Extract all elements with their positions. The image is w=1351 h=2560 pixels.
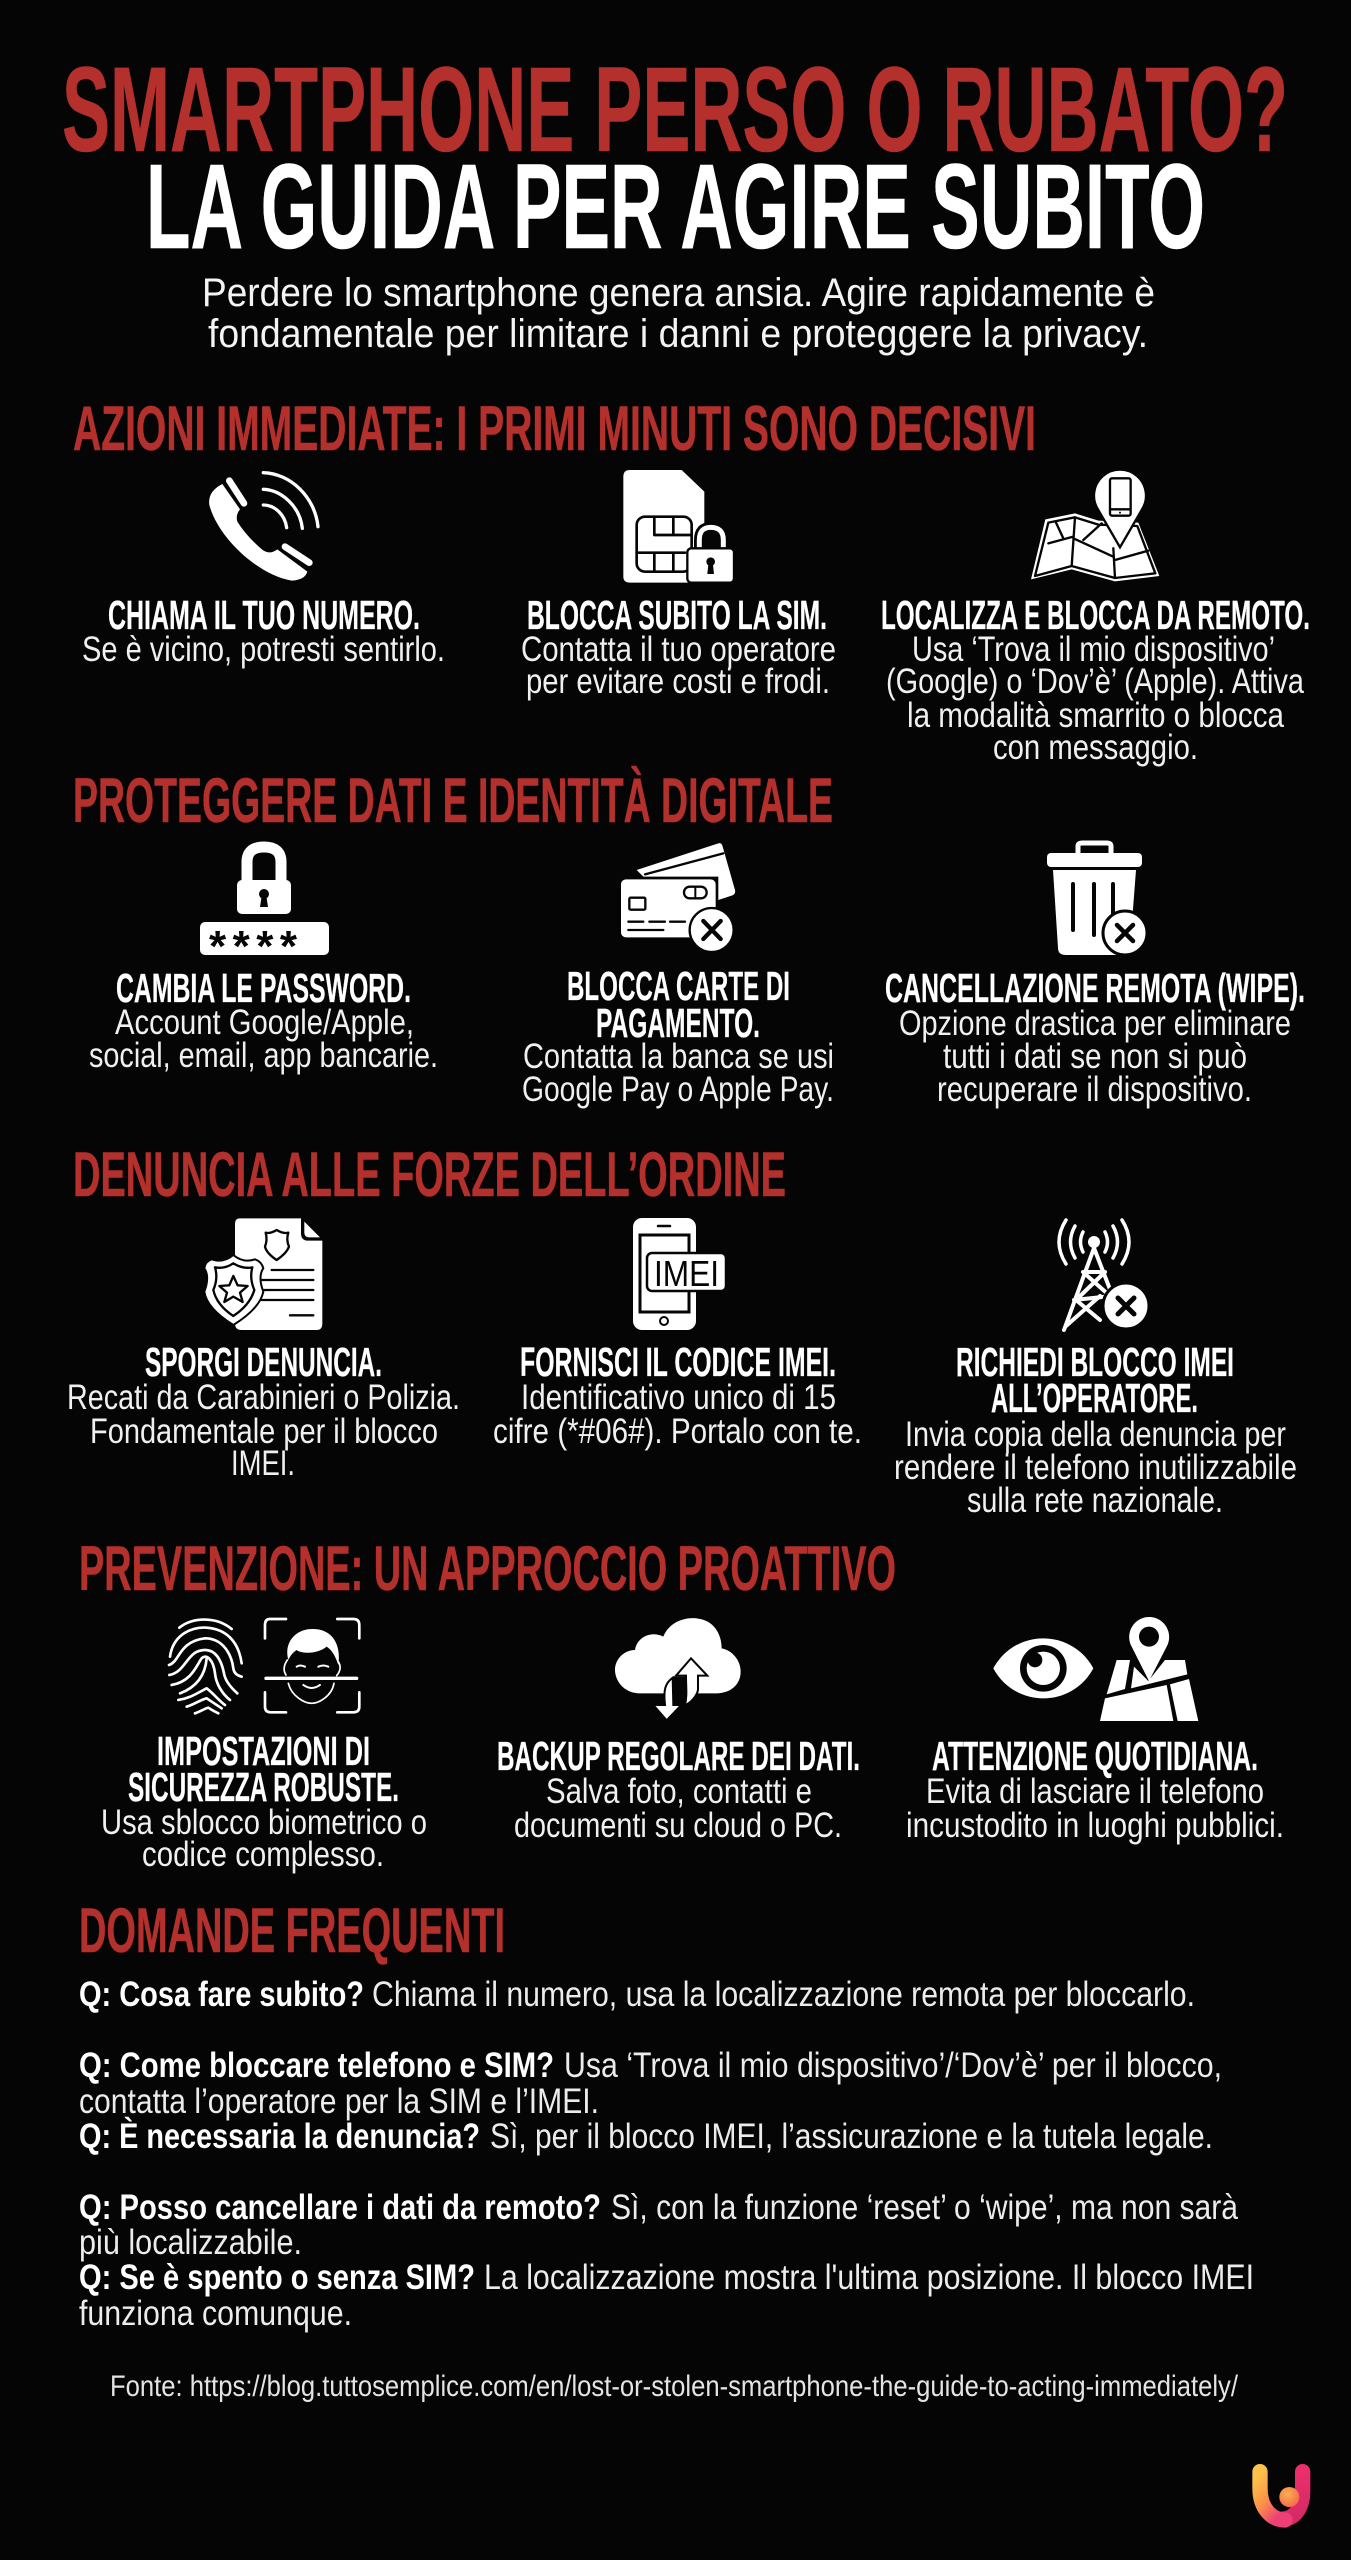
card text: carte: Google Pay o Apple Pay. <box>522 1070 834 1109</box>
card text: localizza: la modalità smarrito o blocca <box>907 696 1284 735</box>
faq 2: contatta l’operatore per la SIM e l’IMEI. <box>79 2082 599 2121</box>
logo <box>1260 2472 1303 2520</box>
icon: lock and password <box>200 847 329 971</box>
icon: cell tower blocked <box>1059 1220 1149 1330</box>
card text: wipe: tutti i dati se non si può <box>943 1037 1247 1076</box>
icon: payment cards blocked <box>620 843 735 952</box>
card text: imei <box>493 1378 862 1451</box>
faq 1: Chiama il numero, usa la localizzazione remota per bloccarlo. <box>372 1975 1195 2014</box>
card text: denuncia <box>67 1378 460 1483</box>
faq 3: Sì, per il blocco IMEI, l’assicurazione e la tutela legale. <box>490 2117 1213 2156</box>
heading: proteggere dati: PROTEGGERE DATI E IDENTITÀ DIGITALE <box>73 766 833 836</box>
icon: phone with IMEI: IMEI <box>654 1253 719 1294</box>
card text: blocco imei <box>894 1415 1297 1520</box>
card text: denuncia: IMEI. <box>231 1444 295 1483</box>
icon: eye and map pin <box>993 1617 1198 1721</box>
card text: wipe: recuperare il dispositivo. <box>937 1070 1252 1109</box>
card text: sim <box>521 630 836 701</box>
card heading: denuncia: SPORGI DENUNCIA. <box>145 1339 382 1385</box>
icon: police report <box>204 1218 322 1330</box>
faq 5: funziona comunque. <box>79 2294 352 2333</box>
card heading: password: CAMBIA LE PASSWORD. <box>116 965 411 1011</box>
card heading: chiama: CHIAMA IL TUO NUMERO. <box>108 592 420 638</box>
icon: fingerprint and face id <box>169 1619 359 1713</box>
card text: attenzione <box>906 1772 1284 1845</box>
faq 2: Usa ‘Trova il mio dispositivo’/‘Dov’è’ per il blocco, <box>564 2046 1222 2085</box>
card heading: carte <box>567 963 790 1046</box>
card heading: sicurezza: SICUREZZA ROBUSTE. <box>128 1764 399 1810</box>
faq 2 <box>79 2046 1222 2121</box>
card text: backup: Salva foto, contatti e <box>546 1772 812 1811</box>
icon: cloud backup <box>615 1618 741 1720</box>
card text: blocco imei: sulla rete nazionale. <box>967 1481 1223 1520</box>
panel: prevenzione <box>79 1534 1284 1874</box>
card text: attenzione: incustodito in luoghi pubblici. <box>906 1806 1284 1845</box>
faq 4: Q: Posso cancellare i dati da remoto? <box>79 2188 601 2227</box>
card text: attenzione: Evita di lasciare il telefono <box>926 1772 1264 1811</box>
icon: lock and password: **** <box>209 922 298 971</box>
intro text: fondamentale per limitare i danni e proteggere la privacy. <box>208 312 1148 356</box>
faq 3: Q: È necessaria la denuncia? <box>79 2116 480 2156</box>
card text: carte: Contatta la banca se usi <box>523 1037 834 1076</box>
heading: denuncia: DENUNCIA ALLE FORZE DELL’ORDINE <box>73 1140 786 1210</box>
card text: sim: per evitare costi e frodi. <box>526 662 830 701</box>
heading: domande frequenti: DOMANDE FREQUENTI <box>79 1896 505 1966</box>
card text: password: social, email, app bancarie. <box>89 1036 438 1075</box>
card text: imei: cifre (*#06#). Portalo con te. <box>493 1412 862 1451</box>
card heading: carte: PAGAMENTO. <box>596 1000 760 1046</box>
card text: chiama: Se è vicino, potresti sentirlo. <box>82 630 445 669</box>
panel: domande frequenti <box>79 1896 1254 2333</box>
intro text: Perdere lo smartphone genera ansia. Agire rapidamente è <box>202 271 1155 315</box>
card text: backup: documenti su cloud o PC. <box>514 1806 842 1845</box>
panel: denuncia <box>67 1140 1297 1520</box>
faq 1: Q: Cosa fare subito? <box>79 1975 364 2014</box>
faq 4: Sì, con la funzione ‘reset’ o ‘wipe’, ma non sarà <box>611 2188 1238 2227</box>
card text: wipe <box>899 1004 1291 1109</box>
card text: backup <box>514 1772 842 1845</box>
card heading: sicurezza <box>128 1728 399 1810</box>
icon: phone with IMEI <box>633 1218 726 1330</box>
card heading: imei: FORNISCI IL CODICE IMEI. <box>520 1339 836 1385</box>
panel: azioni immediate <box>73 394 1310 767</box>
card heading: sicurezza: IMPOSTAZIONI DI <box>157 1728 370 1774</box>
panel: proteggere dati <box>73 766 1305 1109</box>
card text: sicurezza: Usa sblocco biometrico o <box>101 1803 427 1842</box>
card text: imei: Identificativo unico di 15 <box>521 1378 836 1417</box>
card text: localizza: con messaggio. <box>993 728 1198 767</box>
card text: carte <box>522 1037 834 1109</box>
faq 3 <box>79 2116 1213 2156</box>
faq 5 <box>79 2258 1254 2333</box>
card text: localizza <box>886 630 1304 767</box>
card heading: sim: BLOCCA SUBITO LA SIM. <box>527 592 827 638</box>
faq 5: Q: Se è spento o senza SIM? <box>79 2258 475 2297</box>
faq 5: La localizzazione mostra l'ultima posizione. Il blocco IMEI <box>484 2258 1254 2297</box>
card text: password <box>89 1003 438 1075</box>
card text: localizza: Usa ‘Trova il mio dispositivo’ <box>912 630 1275 669</box>
card text: sicurezza: codice complesso. <box>142 1835 384 1874</box>
card heading: backup: BACKUP REGOLARE DEI DATI. <box>497 1733 860 1779</box>
faq 4: più localizzabile. <box>79 2223 302 2262</box>
intro text <box>202 271 1155 356</box>
faq 4 <box>79 2188 1238 2262</box>
icon: phone call <box>209 473 318 581</box>
title <box>62 41 1288 274</box>
card text: denuncia: Fondamentale per il blocco <box>90 1412 438 1451</box>
card text: password: Account Google/Apple, <box>115 1003 414 1042</box>
icon: sim with lock <box>623 470 734 583</box>
icon: trash blocked <box>1047 843 1147 955</box>
card text: sicurezza <box>101 1803 427 1874</box>
faq 1 <box>79 1975 1195 2014</box>
faq 2: Q: Come bloccare telefono e SIM? <box>79 2046 554 2085</box>
card text: sim: Contatta il tuo operatore <box>521 630 836 669</box>
card heading: blocco imei <box>956 1339 1234 1421</box>
card heading: carte: BLOCCA CARTE DI <box>567 963 790 1009</box>
card heading: blocco imei: ALL’OPERATORE. <box>991 1375 1198 1421</box>
card text: denuncia: Recati da Carabinieri o Polizia. <box>67 1378 460 1417</box>
icon: map with phone pin <box>1031 470 1159 581</box>
